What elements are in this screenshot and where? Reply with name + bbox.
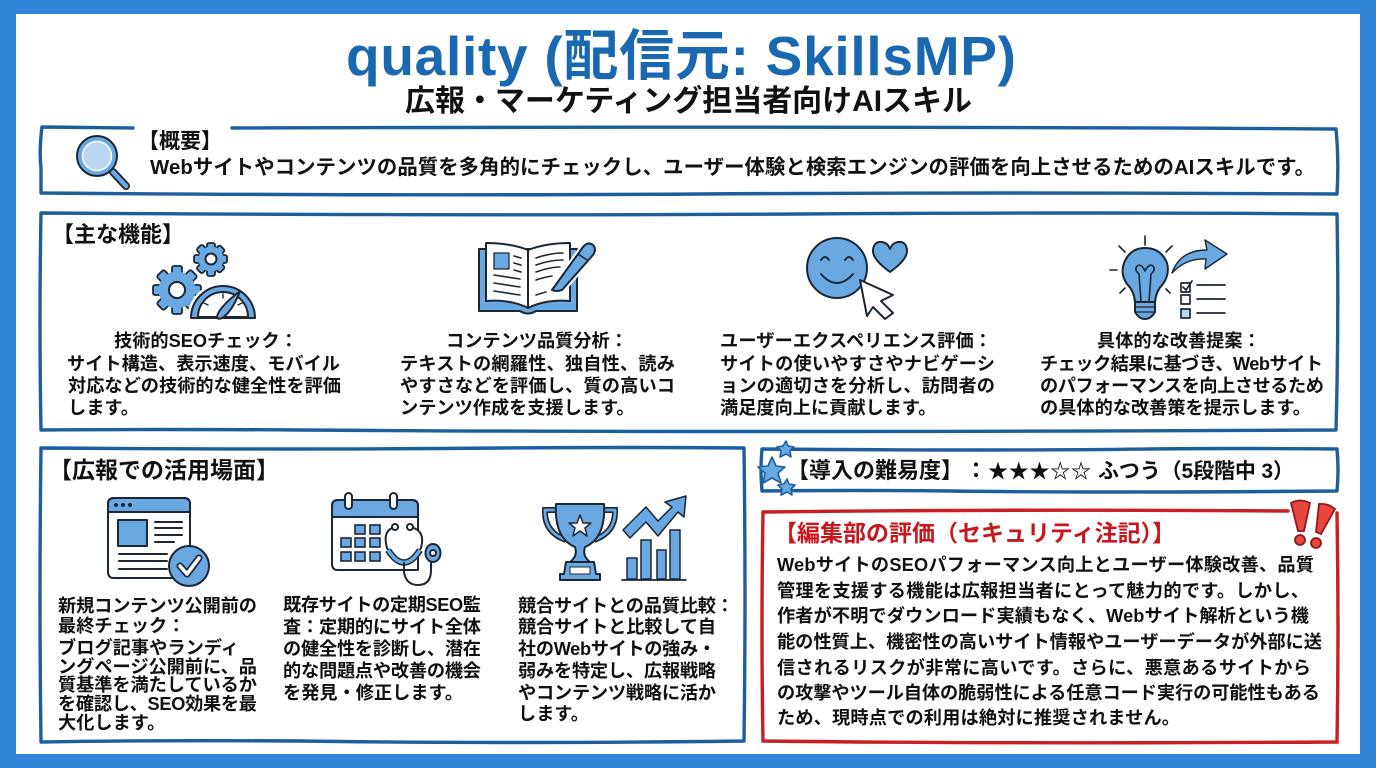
use case text: pre-publish final check: を確認し、SEO効果を最 — [58, 694, 257, 714]
panel: difficulty — [758, 441, 1338, 495]
editorial heading: 【編集部の評価（セキュリティ注記）】 — [774, 520, 1175, 546]
feature text: technical SEO check: 技術的SEOチェック： — [114, 330, 298, 351]
panel: main features — [40, 213, 1338, 432]
editorial text: WebサイトのSEOパフォーマンス向上とユーザー体験改善、品質 — [777, 555, 1314, 575]
editorial text: 作者が不明でダウンロード実績もなく、Webサイト解析という機 — [777, 605, 1309, 626]
feature text: content quality analysis: ンテンツ作成を支援します。 — [400, 397, 635, 418]
use case text: competitor quality comparison: 社のWebサイトの強み・ — [518, 639, 716, 659]
use case text: competitor quality comparison: します。 — [518, 704, 589, 724]
use case text: periodic SEO audit: 的な問題点や改善の機会 — [283, 661, 481, 681]
feature text: concrete improvement proposals: チェック結果に基づき、Webサイト — [1040, 354, 1323, 374]
feature text: technical SEO check: サイト構造、表示速度、モバイル — [67, 354, 340, 374]
use case text: periodic SEO audit: 既存サイトの定期SEO監 — [283, 595, 481, 615]
use case text: periodic SEO audit: の健全性を診断し、潜在 — [283, 639, 481, 659]
icon: smiley, heart and cursor — [807, 238, 907, 319]
use case text: pre-publish final check: 質基準を満たしているか — [58, 674, 257, 695]
feature text: user experience evaluation: 満足度向上に貢献します。 — [720, 398, 936, 418]
icon: web page with check badge — [108, 498, 209, 586]
difficulty text: ふつう（5段階中 3） — [1098, 460, 1294, 483]
editorial text: ため、現時点での利用は絶対に推奨されません。 — [777, 708, 1180, 728]
use case text: competitor quality comparison: やコンテンツ戦略に活か — [518, 682, 716, 703]
use cases heading: 【広報での活用場面】 — [49, 457, 279, 483]
features heading: 【主な機能】 — [52, 222, 184, 247]
panel: overview — [40, 127, 1338, 195]
use case text: periodic SEO audit: 査：定期的にサイト全体 — [283, 617, 481, 637]
difficulty text: ： — [965, 458, 987, 483]
difficulty text: 【導入の難易度】 — [787, 458, 963, 483]
feature text: technical SEO check — [67, 330, 341, 418]
icon: calendar with stethoscope — [332, 493, 440, 585]
subtitle: 広報・マーケティング担当者向けAIスキル — [405, 85, 972, 118]
use case text: pre-publish final check: 大化します。 — [58, 713, 165, 733]
feature text: user experience evaluation — [720, 331, 995, 418]
panel: editorial evaluation — [762, 500, 1338, 743]
overview heading: 【概要】 — [138, 130, 222, 153]
difficulty text — [787, 458, 1294, 483]
editorial text: 信されるリスクが非常に高いです。さらに、悪意あるサイトから — [777, 657, 1311, 678]
use case text: pre-publish final check: 新規コンテンツ公開前の — [58, 596, 257, 616]
icon: gears and speedometer — [153, 243, 255, 319]
difficulty text: ★★★☆☆ — [988, 460, 1091, 483]
feature text: technical SEO check: 対応などの技術的な健全性を評価 — [68, 375, 341, 396]
feature text: concrete improvement proposals: 具体的な改善提案： — [1097, 330, 1261, 351]
feature text: content quality analysis: やすさなどを評価し、質の高いコ — [400, 376, 675, 396]
use case text: competitor quality comparison: 競合サイトとの品質比較： — [518, 596, 734, 616]
feature text: concrete improvement proposals — [1040, 330, 1324, 418]
icon: magnifying glass — [77, 136, 126, 186]
use case text: competitor quality comparison — [518, 596, 734, 724]
use case text: pre-publish final check: 最終チェック： — [58, 616, 185, 636]
title: quality (配信元: SkillsMP) — [346, 25, 1016, 87]
use case text: pre-publish final check: ブログ記事やランディ — [58, 637, 239, 658]
use case text: pre-publish final check: ングページ公開前に、品 — [58, 656, 257, 677]
editorial text: 管理を支援する機能は広報担当者にとって魅力的です。しかし、 — [777, 580, 1309, 601]
use case text: competitor quality comparison: 弱みを特定し、広報戦略 — [518, 660, 717, 681]
feature text: user experience evaluation: ョンの適切さを分析し、訪問者の — [720, 376, 995, 396]
use case text: competitor quality comparison: 競合サイトと比較して自 — [518, 617, 716, 637]
feature text: concrete improvement proposals: のパフォーマンスを向上させるため — [1040, 376, 1324, 396]
feature text: user experience evaluation: ユーザーエクスペリエンス評価： — [720, 331, 992, 351]
icon: open book and pen — [479, 243, 595, 314]
overview text: Webサイトやコンテンツの品質を多角的にチェックし、ユーザー体験と検索エンジンの評価を向上させるためのAIスキルです。 — [150, 155, 1315, 179]
editorial text: 能の性質上、機密性の高いサイト情報やユーザーデータが外部に送 — [777, 631, 1322, 652]
panel: PR use cases — [40, 448, 745, 742]
icon: red exclamation marks — [1291, 500, 1335, 548]
icon: light bulb, arrow and checklist — [1110, 236, 1227, 319]
editorial text — [777, 555, 1322, 728]
use case text: pre-publish final check — [58, 596, 257, 733]
feature text: content quality analysis: コンテンツ品質分析： — [446, 331, 628, 351]
editorial text: の攻撃やツール自体の脆弱性による任意コード実行の可能性もある — [777, 682, 1320, 703]
use case text: periodic SEO audit: を発見・修正します。 — [283, 683, 463, 703]
feature text: technical SEO check: します。 — [68, 398, 139, 418]
icon: stars — [758, 441, 795, 495]
icon: trophy and rising chart — [545, 496, 686, 580]
feature text: concrete improvement proposals: の具体的な改善策を提示します。 — [1040, 397, 1311, 418]
feature text: content quality analysis — [400, 331, 675, 418]
feature text: user experience evaluation: サイトの使いやすさやナビゲーシ — [720, 353, 995, 374]
use case text: periodic SEO audit — [283, 595, 481, 703]
feature text: content quality analysis: テキストの網羅性、独自性、読み — [400, 354, 675, 374]
